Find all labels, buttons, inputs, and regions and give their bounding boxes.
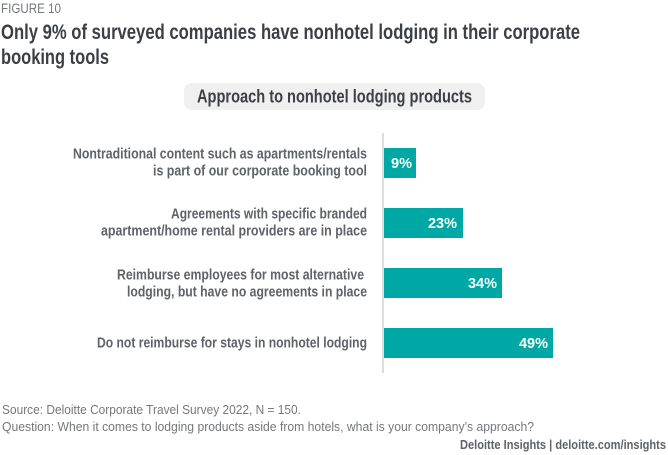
title: booking tools [1, 46, 109, 69]
row 4: 49% [519, 336, 548, 352]
figure label: FIGURE 10 [1, 1, 61, 16]
source note: Source: Deloitte Corporate Travel Survey 2022, N = 150. [2, 402, 301, 417]
row 2: 23% [428, 216, 457, 232]
row 4: Do not reimburse for stays in nonhotel lodging [97, 334, 367, 352]
row 2 [101, 206, 463, 240]
title [1, 21, 580, 69]
row 4 [97, 328, 553, 358]
source note [2, 402, 534, 434]
row 1: Nontraditional content such as apartments/rentals [73, 146, 367, 162]
source note: Question: When it comes to lodging products aside from hotels, what is your company’s approach? [2, 419, 534, 434]
row 3: Reimburse employees for most alternative [117, 266, 364, 284]
row 1: is part of our corporate booking tool [153, 162, 367, 180]
row 2: Agreements with specific branded [171, 206, 367, 222]
bar chart [73, 133, 553, 373]
row 1 [73, 146, 416, 180]
row 3 [117, 266, 502, 300]
row 3: 34% [468, 276, 497, 292]
row 1: 9% [391, 156, 412, 172]
row 2: apartment/home rental providers are in place [101, 222, 367, 240]
row 3: lodging, but have no agreements in place [127, 284, 367, 300]
chart heading pill [184, 83, 485, 110]
chart heading pill: Approach to nonhotel lodging products [197, 86, 472, 106]
